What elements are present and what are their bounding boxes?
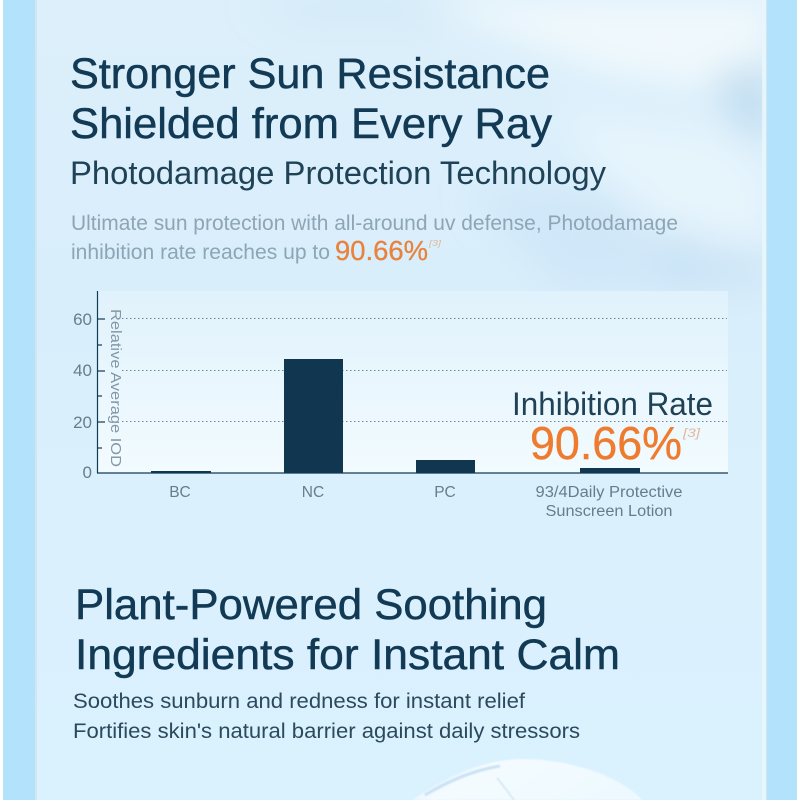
- callout: inhibition rate: 90.66%: [530, 417, 682, 469]
- description text: [3]: [428, 239, 442, 248]
- description text: Ultimate sun protection with all-around uv defense, Photodamage: [71, 211, 678, 235]
- product: cream dome: [412, 759, 642, 800]
- heading: plant-powered soothing: [75, 581, 620, 679]
- x-axis labels: Sunscreen Lotion: [546, 503, 672, 520]
- y-axis tick labels: 60: [73, 310, 92, 329]
- bar chart: [73, 291, 728, 520]
- description text: inhibition rate reaches up to: [71, 240, 330, 264]
- axes: [97, 291, 728, 473]
- title: Stronger Sun Resistance: Stronger Sun Resistance: [70, 50, 550, 98]
- x-axis labels: [169, 484, 682, 520]
- heading: plant-powered soothing: Plant-Powered Soothing: [75, 581, 547, 629]
- benefits text: [73, 689, 580, 743]
- callout: inhibition rate: [3]: [682, 426, 701, 440]
- y-axis title: Relative Average IOD: [107, 309, 123, 467]
- benefits text: Fortifies skin's natural barrier against daily stressors: [73, 719, 580, 743]
- bars: [151, 359, 640, 473]
- callout: inhibition rate: Inhibition Rate: [512, 386, 713, 422]
- benefits text: Soothes sunburn and redness for instant relief: [73, 689, 525, 713]
- title: Stronger Sun Resistance: [70, 50, 552, 148]
- x-axis labels: BC: [169, 484, 191, 501]
- y-axis tick labels: 0: [83, 463, 92, 482]
- callout: inhibition rate: [512, 386, 713, 469]
- description text: [71, 211, 678, 266]
- y-axis tick labels: [73, 310, 92, 482]
- y-axis tick labels: 20: [73, 413, 92, 432]
- heading: plant-powered soothing: Ingredients for Instant Calm: [75, 631, 620, 679]
- x-axis labels: 93/4Daily Protective: [536, 484, 682, 501]
- x-axis labels: NC: [302, 484, 324, 501]
- y-axis tick labels: 40: [73, 361, 92, 380]
- title: Stronger Sun Resistance: Shielded from Every Ray: [70, 100, 552, 148]
- x-axis labels: PC: [434, 484, 456, 501]
- subtitle: Photodamage Protection Technology: [70, 155, 606, 191]
- description text: 90.66%: [335, 235, 428, 266]
